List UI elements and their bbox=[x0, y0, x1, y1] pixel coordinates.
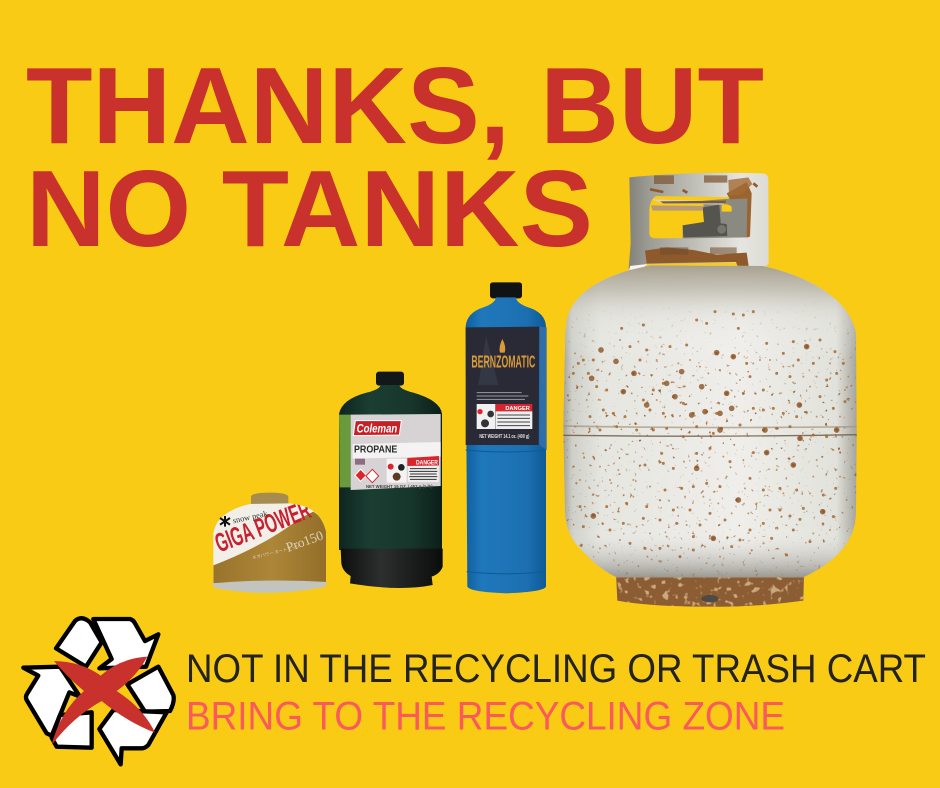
title bbox=[26, 45, 764, 270]
icon: Coleman propane bottle bbox=[339, 372, 443, 588]
icon: Giga Power canister bbox=[210, 493, 333, 593]
title: NO TANKS bbox=[26, 148, 593, 270]
icon: Bernzomatic torch cylinder: NET WEIGHT 14.1 oz. (400 g) bbox=[479, 434, 529, 440]
valve behind window bbox=[683, 197, 748, 238]
title: THANKS, BUT bbox=[26, 45, 764, 167]
rust texture bbox=[564, 306, 856, 578]
icon: large rusty propane tank bbox=[560, 173, 860, 608]
icon: Giga Power canister: Pro150 bbox=[284, 527, 326, 555]
danger block: DANGER bbox=[505, 406, 530, 412]
tank body bbox=[563, 265, 857, 577]
tank collar bbox=[629, 173, 769, 272]
icon: Giga Power canister: snow peak bbox=[232, 509, 269, 525]
icon: Coleman propane bottle: PROPANE bbox=[354, 444, 398, 455]
icon: Coleman propane bottle: NET WEIGHT 16 OZ. / 453 g (1 lb) bbox=[366, 484, 433, 489]
Coleman logo: Coleman bbox=[357, 422, 397, 436]
tank shading bbox=[563, 265, 857, 577]
danger block: DANGER bbox=[416, 459, 438, 466]
icon: Bernzomatic torch cylinder: BERNZOMATIC bbox=[471, 352, 535, 372]
danger block bbox=[355, 456, 439, 483]
message: bring to recycling zone: BRING TO THE RECYCLING ZONE bbox=[186, 694, 785, 738]
collar rust bbox=[645, 247, 761, 272]
danger block bbox=[477, 404, 532, 429]
red X bbox=[52, 657, 155, 745]
tank foot ring bbox=[616, 577, 804, 607]
tank seam bbox=[563, 426, 857, 436]
icon: Bernzomatic torch cylinder bbox=[466, 282, 547, 593]
Giga Power label text: GIGA POWER bbox=[211, 494, 315, 558]
icon: crossed-out recycling symbol bbox=[23, 618, 174, 764]
icon: small tanks group bbox=[210, 282, 547, 593]
icon: Giga Power canister: ギガパワー カートリッジ bbox=[251, 543, 301, 561]
rust speckles bbox=[570, 312, 848, 557]
